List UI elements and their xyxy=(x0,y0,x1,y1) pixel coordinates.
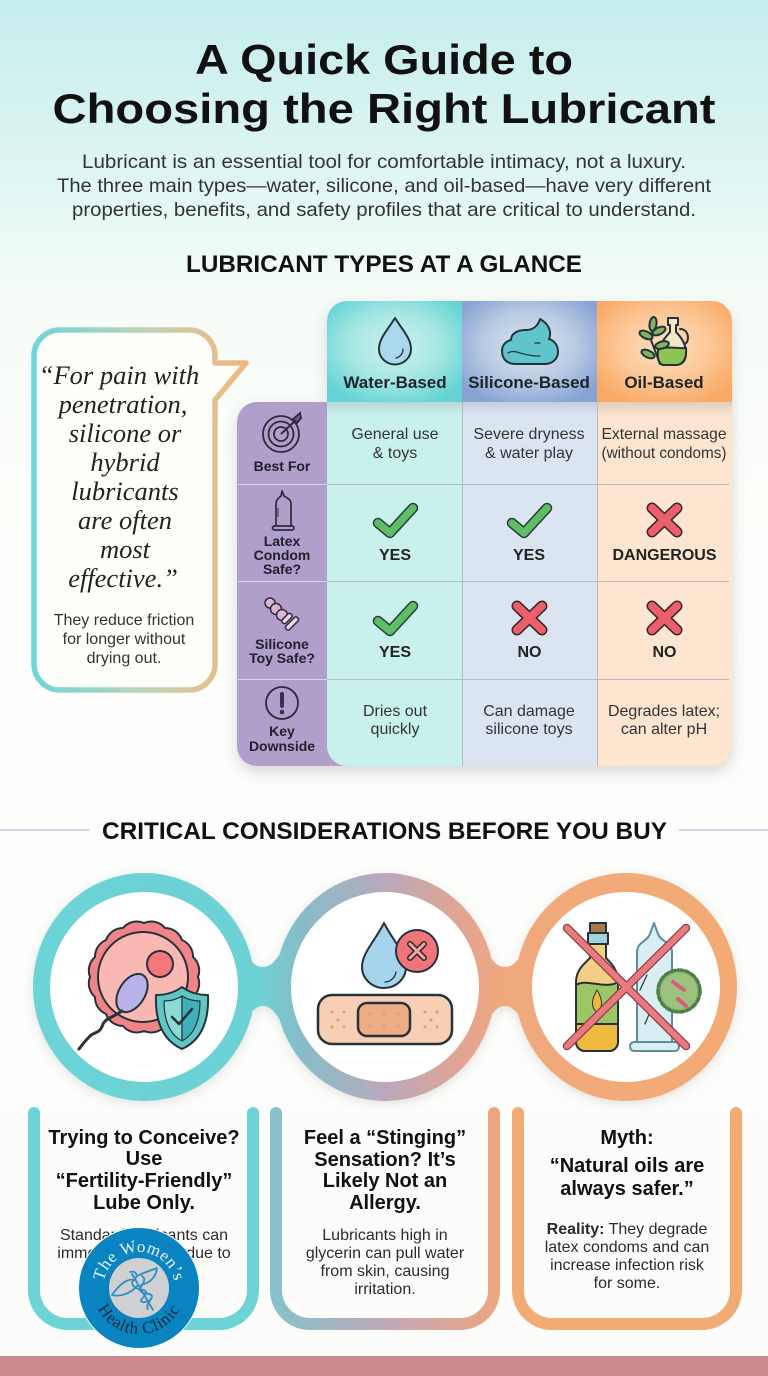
logo: the women's health clinic: The Women’s xyxy=(92,1240,182,1280)
icon: condom xyxy=(272,491,294,530)
row: key downside cells: can alter pH xyxy=(621,721,707,738)
card: trying to conceive xyxy=(34,1113,253,1324)
icon: check xyxy=(378,606,413,631)
card: stinging sensation: Sensation? It’s xyxy=(314,1149,456,1171)
card: stinging sensation: Likely Not an xyxy=(323,1170,447,1192)
card: trying to conceive: immobilize sperm due to xyxy=(57,1245,231,1262)
column: oil-based header xyxy=(624,317,704,392)
card: trying to conceive: “Fertility-Friendly” xyxy=(56,1170,232,1192)
row label: best for: Best For xyxy=(254,458,311,474)
callout: quote: drying out. xyxy=(87,650,161,667)
icon: check xyxy=(378,508,413,533)
row: silicone toy safe cells: NO xyxy=(518,644,542,661)
row: key downside cells: silicone toys xyxy=(485,721,573,738)
row: latex condom safe cells: YES xyxy=(379,547,411,564)
logo: the women's health clinic xyxy=(78,1227,199,1348)
card: stinging sensation: glycerin can pull water xyxy=(306,1245,465,1262)
card: natural oils myth: “Natural oils are xyxy=(550,1155,704,1177)
row: best for cells: & water play xyxy=(485,445,573,462)
row: best for cells: Severe dryness xyxy=(473,426,585,443)
callout: quote: hybrid xyxy=(90,447,160,477)
card: natural oils myth xyxy=(518,1113,736,1324)
icon: silicone toy xyxy=(265,598,299,631)
column: water-based header xyxy=(343,318,447,392)
icon: target xyxy=(263,413,301,452)
row label: best for xyxy=(254,413,311,474)
card: trying to conceive: Lube Only. xyxy=(93,1192,195,1214)
callout: quote: for longer without xyxy=(63,631,186,648)
icon: drop, cross and bandage xyxy=(318,923,452,1044)
card: stinging sensation: from skin, causing xyxy=(321,1263,449,1280)
callout: quote: lubricants xyxy=(71,476,179,506)
card: stinging sensation: Lubricants high in xyxy=(322,1227,448,1244)
card: natural oils myth: always safer.” xyxy=(560,1178,694,1200)
icon: exclamation xyxy=(266,687,298,719)
heading: critical considerations: CRITICAL CONSIDERATIONS BEFORE YOU BUY xyxy=(102,818,667,845)
card: stinging sensation xyxy=(276,1113,494,1324)
title xyxy=(52,36,716,132)
icon: silicone blob xyxy=(502,319,558,364)
row: key downside cells: Degrades latex; xyxy=(608,703,720,720)
column: oil-based header: Oil-Based xyxy=(624,373,704,392)
icon: crossed-out oil bottle and condom xyxy=(567,923,700,1051)
icon: cross xyxy=(652,508,677,532)
intro text: The three main types—water, silicone, and oil-based—have very different xyxy=(57,175,712,197)
title: A Quick Guide to xyxy=(195,36,573,83)
card: natural oils myth: latex condoms and can xyxy=(545,1239,709,1256)
icon: water drop xyxy=(379,318,411,364)
card: natural oils myth: for some. xyxy=(594,1275,660,1292)
column: water-based header: Water-Based xyxy=(343,373,447,392)
row label: latex condom safe: Latex xyxy=(264,533,300,549)
card: stinging sensation: Feel a “Stinging” xyxy=(304,1127,466,1149)
row label: silicone toy safe xyxy=(249,598,315,666)
row: silicone toy safe cells xyxy=(378,606,677,661)
icon: oil bottle and leaves xyxy=(638,317,688,365)
row: key downside cells xyxy=(363,703,720,738)
card: stinging sensation: Allergy. xyxy=(349,1192,421,1214)
row label: key downside: Downside xyxy=(249,738,315,754)
icon: egg, sperm and shield xyxy=(79,922,208,1049)
callout: quote xyxy=(34,330,246,690)
row: latex condom safe cells xyxy=(378,508,717,564)
row: key downside cells: Dries out xyxy=(363,703,428,720)
row: silicone toy safe cells: YES xyxy=(379,644,411,661)
icon: caduceus xyxy=(112,1268,157,1310)
row: best for cells xyxy=(351,426,727,462)
icon: cross xyxy=(652,606,677,630)
row label: silicone toy safe: Toy Safe? xyxy=(249,650,315,666)
column: silicone-based header xyxy=(468,319,590,392)
card: natural oils myth: Myth: xyxy=(600,1127,654,1149)
logo: the women's health clinic: Health Clinic xyxy=(98,1302,180,1334)
callout: quote: “For pain with xyxy=(39,360,199,390)
row: best for cells: General use xyxy=(351,426,439,443)
callout: quote: are often xyxy=(78,505,172,535)
card: stinging sensation: irritation. xyxy=(354,1281,416,1298)
icon: check xyxy=(512,508,547,533)
row label: latex condom safe xyxy=(254,491,310,577)
row label: silicone toy safe: Silicone xyxy=(255,636,309,652)
callout: quote: most xyxy=(100,534,151,564)
row: best for cells: & toys xyxy=(373,445,417,462)
footer bar xyxy=(0,1356,768,1376)
row: latex condom safe cells: YES xyxy=(513,547,545,564)
row: best for cells: (without condoms) xyxy=(602,445,726,462)
row label: key downside: Key xyxy=(269,723,295,739)
intro text: properties, benefits, and safety profiles that are critical to understand. xyxy=(72,199,696,221)
row: silicone toy safe cells: NO xyxy=(652,644,676,661)
column: silicone-based header: Silicone-Based xyxy=(468,373,590,392)
heading: lubricant types: LUBRICANT TYPES AT A GLANCE xyxy=(186,251,582,278)
callout: quote: They reduce friction xyxy=(54,612,194,629)
intro text xyxy=(57,151,712,221)
callout: quote: effective.” xyxy=(68,563,178,593)
card: trying to conceive: Use xyxy=(126,1148,162,1170)
title: Choosing the Right Lubricant xyxy=(52,85,716,132)
row: best for cells: External massage xyxy=(602,426,727,443)
row: latex condom safe cells: DANGEROUS xyxy=(612,547,717,564)
callout: quote: silicone or xyxy=(69,418,182,448)
row: key downside cells: Can damage xyxy=(483,703,575,720)
card: trying to conceive: Standard lubricants can xyxy=(60,1227,228,1244)
linked circles chain xyxy=(33,873,737,1101)
comparison table xyxy=(237,301,732,766)
row label: key downside xyxy=(249,687,315,754)
card: natural oils myth: Reality: They degrade xyxy=(547,1221,707,1238)
row label: latex condom safe: Safe? xyxy=(263,561,301,577)
row label: latex condom safe: Condom xyxy=(254,547,310,563)
icon: cross xyxy=(517,606,542,630)
row: key downside cells: quickly xyxy=(371,721,419,738)
card: trying to conceive: Trying to Conceive? xyxy=(48,1127,240,1149)
card: natural oils myth: increase infection risk xyxy=(550,1257,705,1274)
callout: quote: penetration, xyxy=(57,389,187,419)
intro text: Lubricant is an essential tool for comfortable intimacy, not a luxury. xyxy=(82,151,686,173)
